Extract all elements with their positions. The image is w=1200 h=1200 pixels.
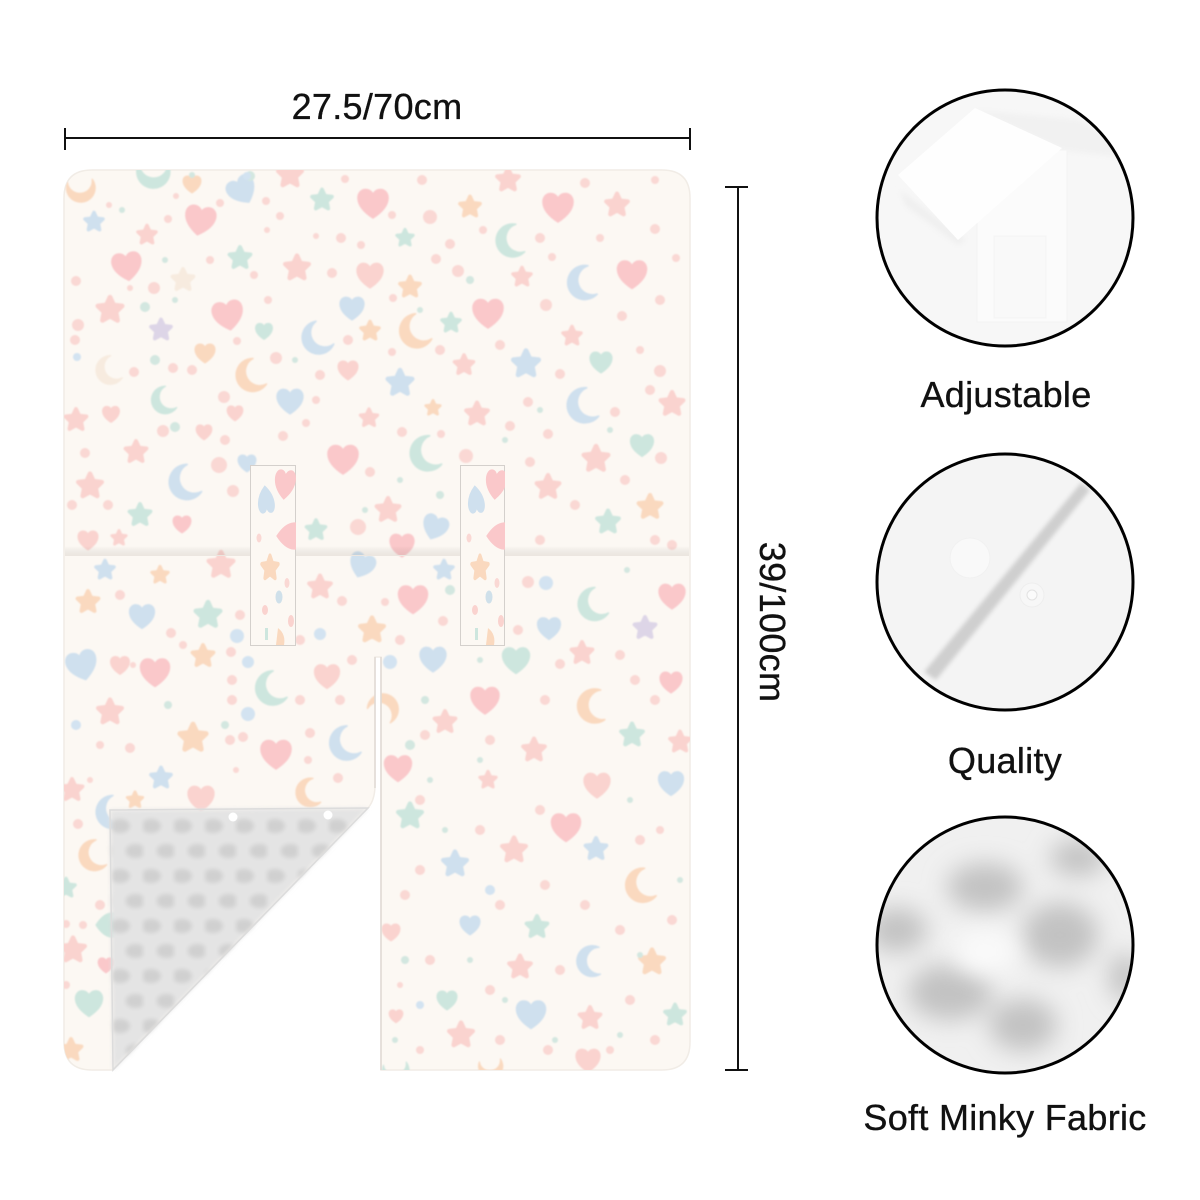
centre slit between the legs — [375, 657, 381, 1070]
strap: right — [460, 465, 505, 646]
height dimension: 39/100cm — [725, 187, 793, 1070]
label: Soft Minky Fabric: Soft Minky Fabric — [863, 1097, 1147, 1138]
fold crease across the blanket — [65, 546, 689, 556]
strap: left — [250, 466, 302, 646]
detail circle: quality snap closure — [875, 452, 1135, 712]
folded corner showing grey minky dimples — [110, 808, 368, 1070]
blanket base fabric — [64, 170, 690, 1070]
height dimension: 39/100cm: 39/100cm — [752, 542, 793, 702]
detail circle: adjustable strap — [875, 88, 1140, 348]
width dimension: 27.5/70cm — [65, 86, 690, 150]
snap buttons — [228, 810, 332, 822]
detail circle: minky fabric dimples — [867, 815, 1141, 1075]
width dimension: 27.5/70cm: 27.5/70cm — [292, 86, 462, 127]
label: Adjustable: Adjustable — [920, 374, 1092, 415]
label: Quality: Quality — [948, 740, 1062, 781]
print: hearts, stars, moons and dots — [57, 151, 690, 1087]
panel: blanket — [57, 151, 690, 1087]
